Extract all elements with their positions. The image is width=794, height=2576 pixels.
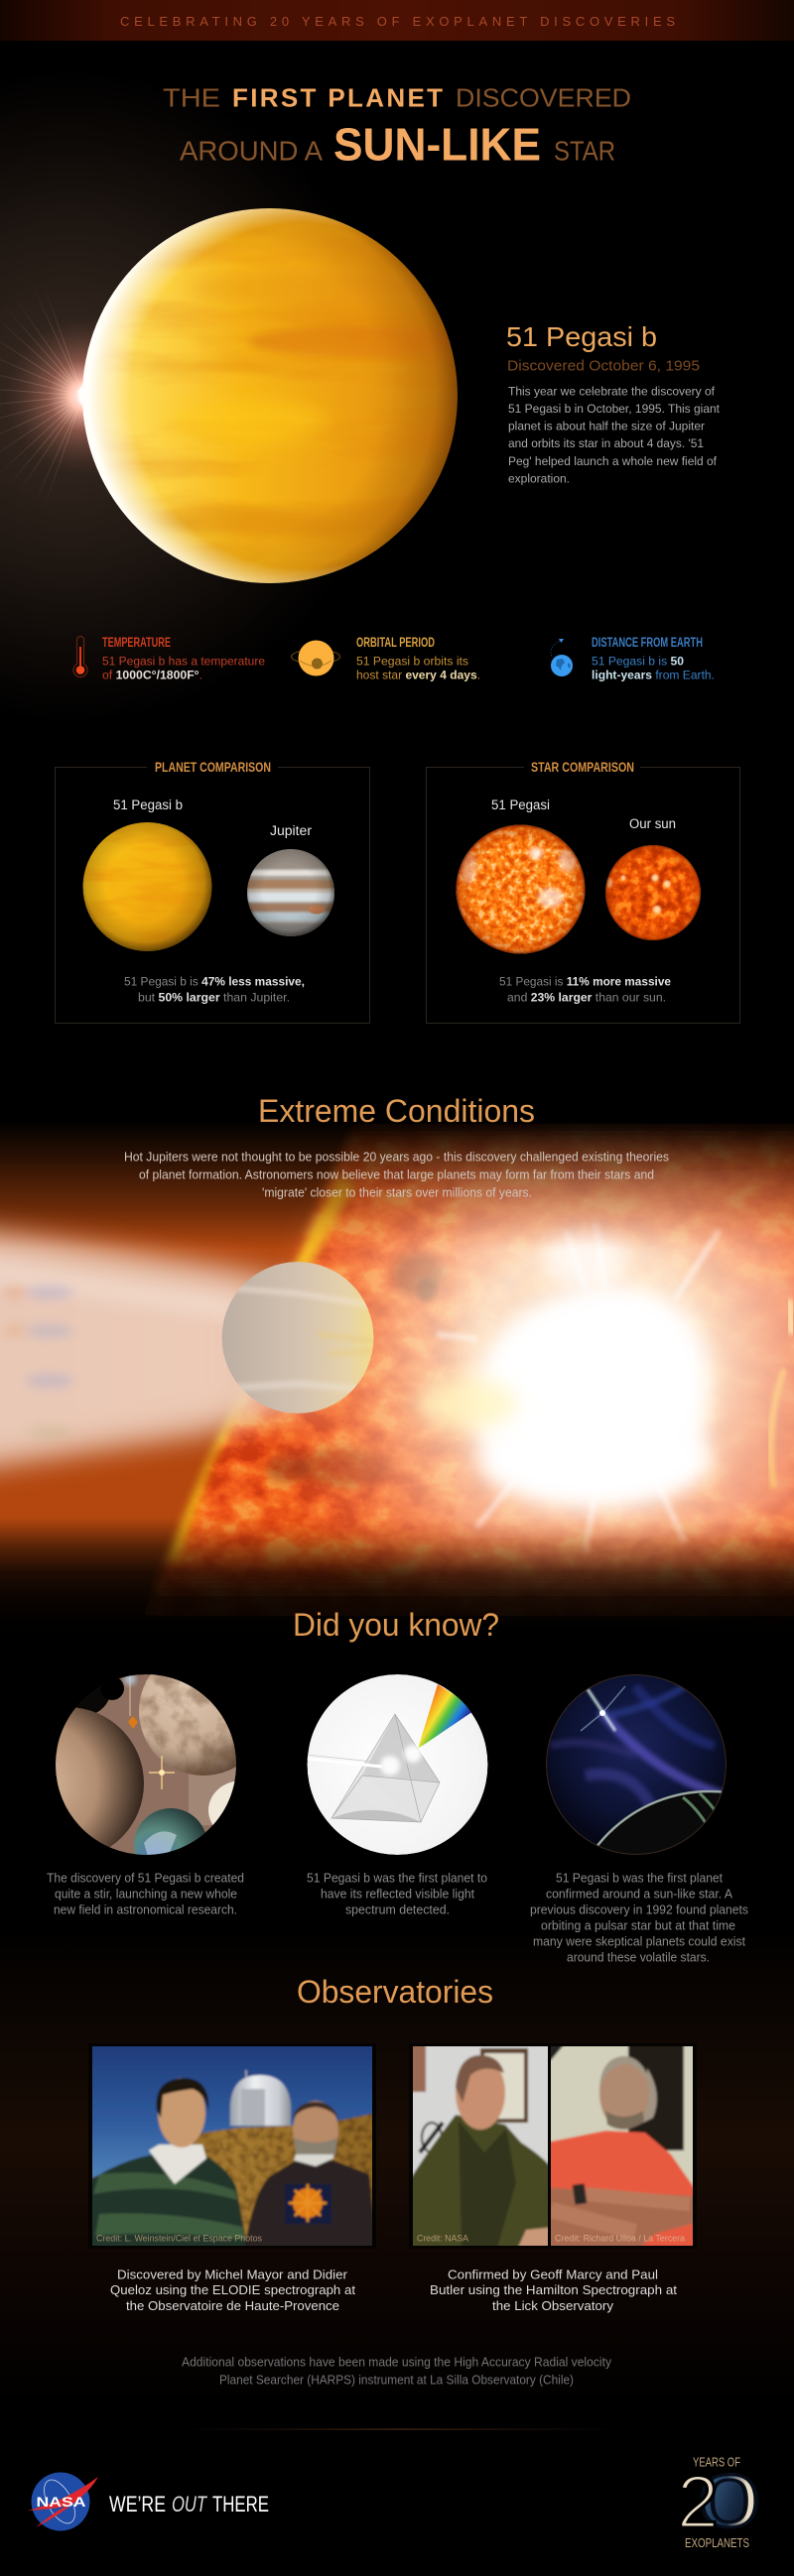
heading: observatories: Observatories: [297, 1974, 493, 2010]
star: 51 Pegasi: [456, 824, 586, 954]
panel: planet comparison: Jupiter: [270, 823, 313, 838]
text: extreme conditions: [124, 1151, 669, 1200]
flare behind planet: [0, 258, 163, 536]
tagline: WE’RE: [109, 2492, 166, 2516]
planet name and description: exploration.: [508, 472, 570, 486]
caption: discovery: Discovered by Michel Mayor and Didier: [117, 2268, 348, 2281]
text: additional observations: Additional observations have been made using the High Accuracy Radial velocity: [182, 2355, 612, 2369]
icon: earth with arc: [551, 639, 573, 676]
text: did you know column 2: spectrum detected.: [345, 1902, 450, 1916]
text: did you know column 2: 51 Pegasi b was the first planet to: [307, 1871, 487, 1885]
photo: Marcy and Butler: Credit: NASA: [417, 2234, 469, 2244]
text: did you know column 1: new field in astronomical research.: [54, 1902, 237, 1916]
title: FIRST PLANET: [232, 83, 443, 113]
logo: 20 years of exoplanets: YEARS OF: [693, 2456, 740, 2470]
logo: 20 years of exoplanets: [677, 2456, 760, 2550]
text: did you know column 3: around these volatile stars.: [567, 1950, 710, 1964]
image: prism and spectrum: [306, 1674, 488, 1855]
stellar surface: [145, 1124, 794, 1616]
illustration: hot Jupiter close to its star: [0, 1124, 794, 1616]
planet 51 Pegasi b: [82, 208, 458, 583]
text: did you know column 3: orbiting a pulsar star but at that time: [541, 1918, 735, 1932]
tagline: THERE: [212, 2492, 269, 2516]
photo: Marcy and Butler: [407, 2041, 699, 2252]
text: additional observations: Planet Searcher (HARPS) instrument at La Silla Observatory (Chile): [219, 2373, 574, 2387]
photo: Marcy and Butler: Credit: Richard Ulloa / La Tercera: [555, 2234, 686, 2244]
text: extreme conditions: Hot Jupiters were not thought to be possible 20 years ago - this discovery challenged existing theories: [124, 1151, 669, 1165]
caption: confirmation: the Lick Observatory: [492, 2298, 614, 2313]
logo: NASA: NASA: [36, 2494, 85, 2510]
fact: distance from earth: DISTANCE FROM EARTH: [592, 635, 703, 650]
fact: temperature: of 1000C°/1800F°.: [102, 669, 202, 682]
text: extreme conditions: 'migrate' closer to their stars over millions of years.: [262, 1186, 532, 1200]
caption: confirmation: [430, 2268, 677, 2313]
text: did you know column 2: [307, 1871, 487, 1916]
top banner: CELEBRATING 20 YEARS OF EXOPLANET DISCOVERIES: [120, 14, 675, 29]
text: extreme conditions: of planet formation. Astronomers now believe that large planets may form far from their stars and: [139, 1168, 654, 1182]
fact: distance from earth: 51 Pegasi b is 50: [592, 655, 684, 669]
fact: distance from earth: [551, 635, 715, 682]
fact: orbital period: ORBITAL PERIOD: [356, 635, 435, 650]
fact: orbital period: host star every 4 days.: [356, 669, 480, 682]
image: planets collage: [56, 1674, 236, 1855]
tagline: OUT: [172, 2492, 207, 2516]
panel: planet comparison: 51 Pegasi b: [113, 797, 183, 812]
particle stream: [0, 1230, 318, 1468]
panel: planet comparison: but 50% larger than Jupiter.: [138, 990, 290, 1004]
planet name and description: Discovered October 6, 1995: [507, 357, 700, 375]
star glare: [286, 1135, 794, 1592]
panel: planet comparison: 51 Pegasi b is 47% less massive,: [124, 974, 305, 988]
fact: orbital period: 51 Pegasi b orbits its: [356, 655, 468, 669]
panel: star comparison: 51 Pegasi: [491, 797, 550, 812]
top banner: [0, 0, 794, 41]
tagline: [109, 2492, 269, 2516]
title: SUN-LIKE: [333, 119, 541, 171]
planet name and description: Peg' helped launch a whole new field of: [508, 454, 718, 468]
logo: NASA: [28, 2472, 98, 2531]
heading: extreme conditions: Extreme Conditions: [258, 1093, 535, 1129]
panel: planet comparison: [56, 759, 369, 1024]
planet name and description: 51 Pegasi b in October, 1995. This giant: [508, 402, 721, 416]
photo: Mayor and Queloz: Credit: L. Weinstein/Ciel et Espace Photos: [96, 2234, 262, 2244]
logo: 20 years of exoplanets: 2: [677, 2460, 719, 2543]
panel: star comparison: [427, 759, 740, 1024]
title: AROUND A: [180, 135, 324, 167]
text: did you know column 1: [47, 1871, 244, 1916]
planet name and description: planet is about half the size of Jupiter: [508, 419, 705, 432]
portrait: Paul Butler: [551, 2046, 693, 2246]
planet: Jupiter: [247, 849, 334, 936]
fact: orbital period: [292, 635, 480, 682]
panel: star comparison: and 23% larger than our sun.: [507, 990, 666, 1004]
title: DISCOVERED: [456, 83, 631, 113]
planet name and description: and orbits its star in about 4 days. '51: [508, 436, 704, 450]
text: did you know column 3: [530, 1871, 748, 1964]
panel: planet comparison: PLANET COMPARISON: [155, 759, 271, 775]
logo: 20 years of exoplanets: EXOPLANETS: [685, 2536, 749, 2550]
planet name and description: 51 Pegasi b: [506, 321, 657, 352]
planet with stripped atmosphere: [222, 1262, 373, 1413]
planet name and description: [506, 321, 721, 486]
man left: [87, 2154, 248, 2252]
text: did you know column 1: quite a stir, launching a new whole: [55, 1887, 237, 1901]
fact: distance from earth: light-years from Earth.: [592, 669, 715, 682]
title: [163, 83, 631, 171]
fact: temperature: 51 Pegasi b has a temperature: [102, 655, 265, 669]
man right: [244, 2160, 377, 2252]
portrait: Geoff Marcy: [413, 2046, 548, 2246]
planet: 51 Pegasi b small: [83, 822, 212, 951]
fact: temperature: [73, 635, 265, 682]
caption: discovery: Queloz using the ELODIE spectrograph at: [110, 2282, 355, 2297]
fact: temperature: TEMPERATURE: [102, 635, 171, 650]
planet name and description: This year we celebrate the discovery of: [508, 385, 716, 399]
text: did you know column 3: many were skeptical planets could exist: [533, 1934, 746, 1948]
title: STAR: [554, 135, 615, 167]
caption: confirmation: Confirmed by Geoff Marcy and Paul: [448, 2268, 658, 2281]
title: THE: [163, 83, 220, 113]
panel: star comparison: STAR COMPARISON: [531, 759, 634, 775]
image: pulsar and planet: [546, 1674, 727, 1855]
heading: did you know: Did you know?: [293, 1607, 499, 1643]
caption: discovery: the Observatoire de Haute-Provence: [126, 2298, 339, 2313]
caption: confirmation: Butler using the Hamilton Spectrograph at: [430, 2282, 677, 2297]
text: additional observations: [182, 2355, 612, 2387]
icon: planet orbiting star: [292, 641, 339, 676]
text: did you know column 1: The discovery of 51 Pegasi b created: [47, 1871, 244, 1885]
logo: 20 years of exoplanets: 0: [699, 2460, 760, 2543]
panel: star comparison: 51 Pegasi is 11% more massive: [499, 974, 671, 988]
text: did you know column 2: have its reflected visible light: [321, 1887, 475, 1901]
text: did you know column 3: confirmed around a sun-like star. A: [546, 1887, 733, 1901]
text: did you know column 3: previous discovery in 1992 found planets: [530, 1902, 748, 1916]
panel: star comparison: Our sun: [629, 816, 676, 831]
caption: discovery: [110, 2268, 355, 2313]
text: did you know column 3: 51 Pegasi b was the first planet: [556, 1871, 724, 1885]
photo: Mayor and Queloz: [87, 2041, 377, 2252]
star: our sun: [605, 845, 701, 940]
icon: thermometer: [73, 637, 87, 677]
